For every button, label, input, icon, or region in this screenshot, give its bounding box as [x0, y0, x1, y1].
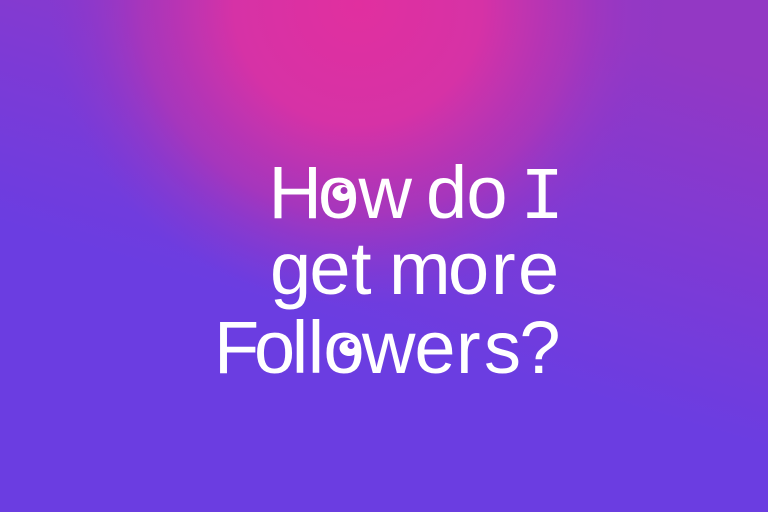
line 3: Followers?	[214, 306, 561, 389]
eye detail: Followers	[340, 340, 358, 356]
line 2: get more	[270, 227, 559, 310]
headline	[214, 151, 564, 389]
line 1: How do	[268, 151, 508, 234]
line 1: I	[520, 157, 564, 241]
eye detail: How	[332, 185, 352, 201]
